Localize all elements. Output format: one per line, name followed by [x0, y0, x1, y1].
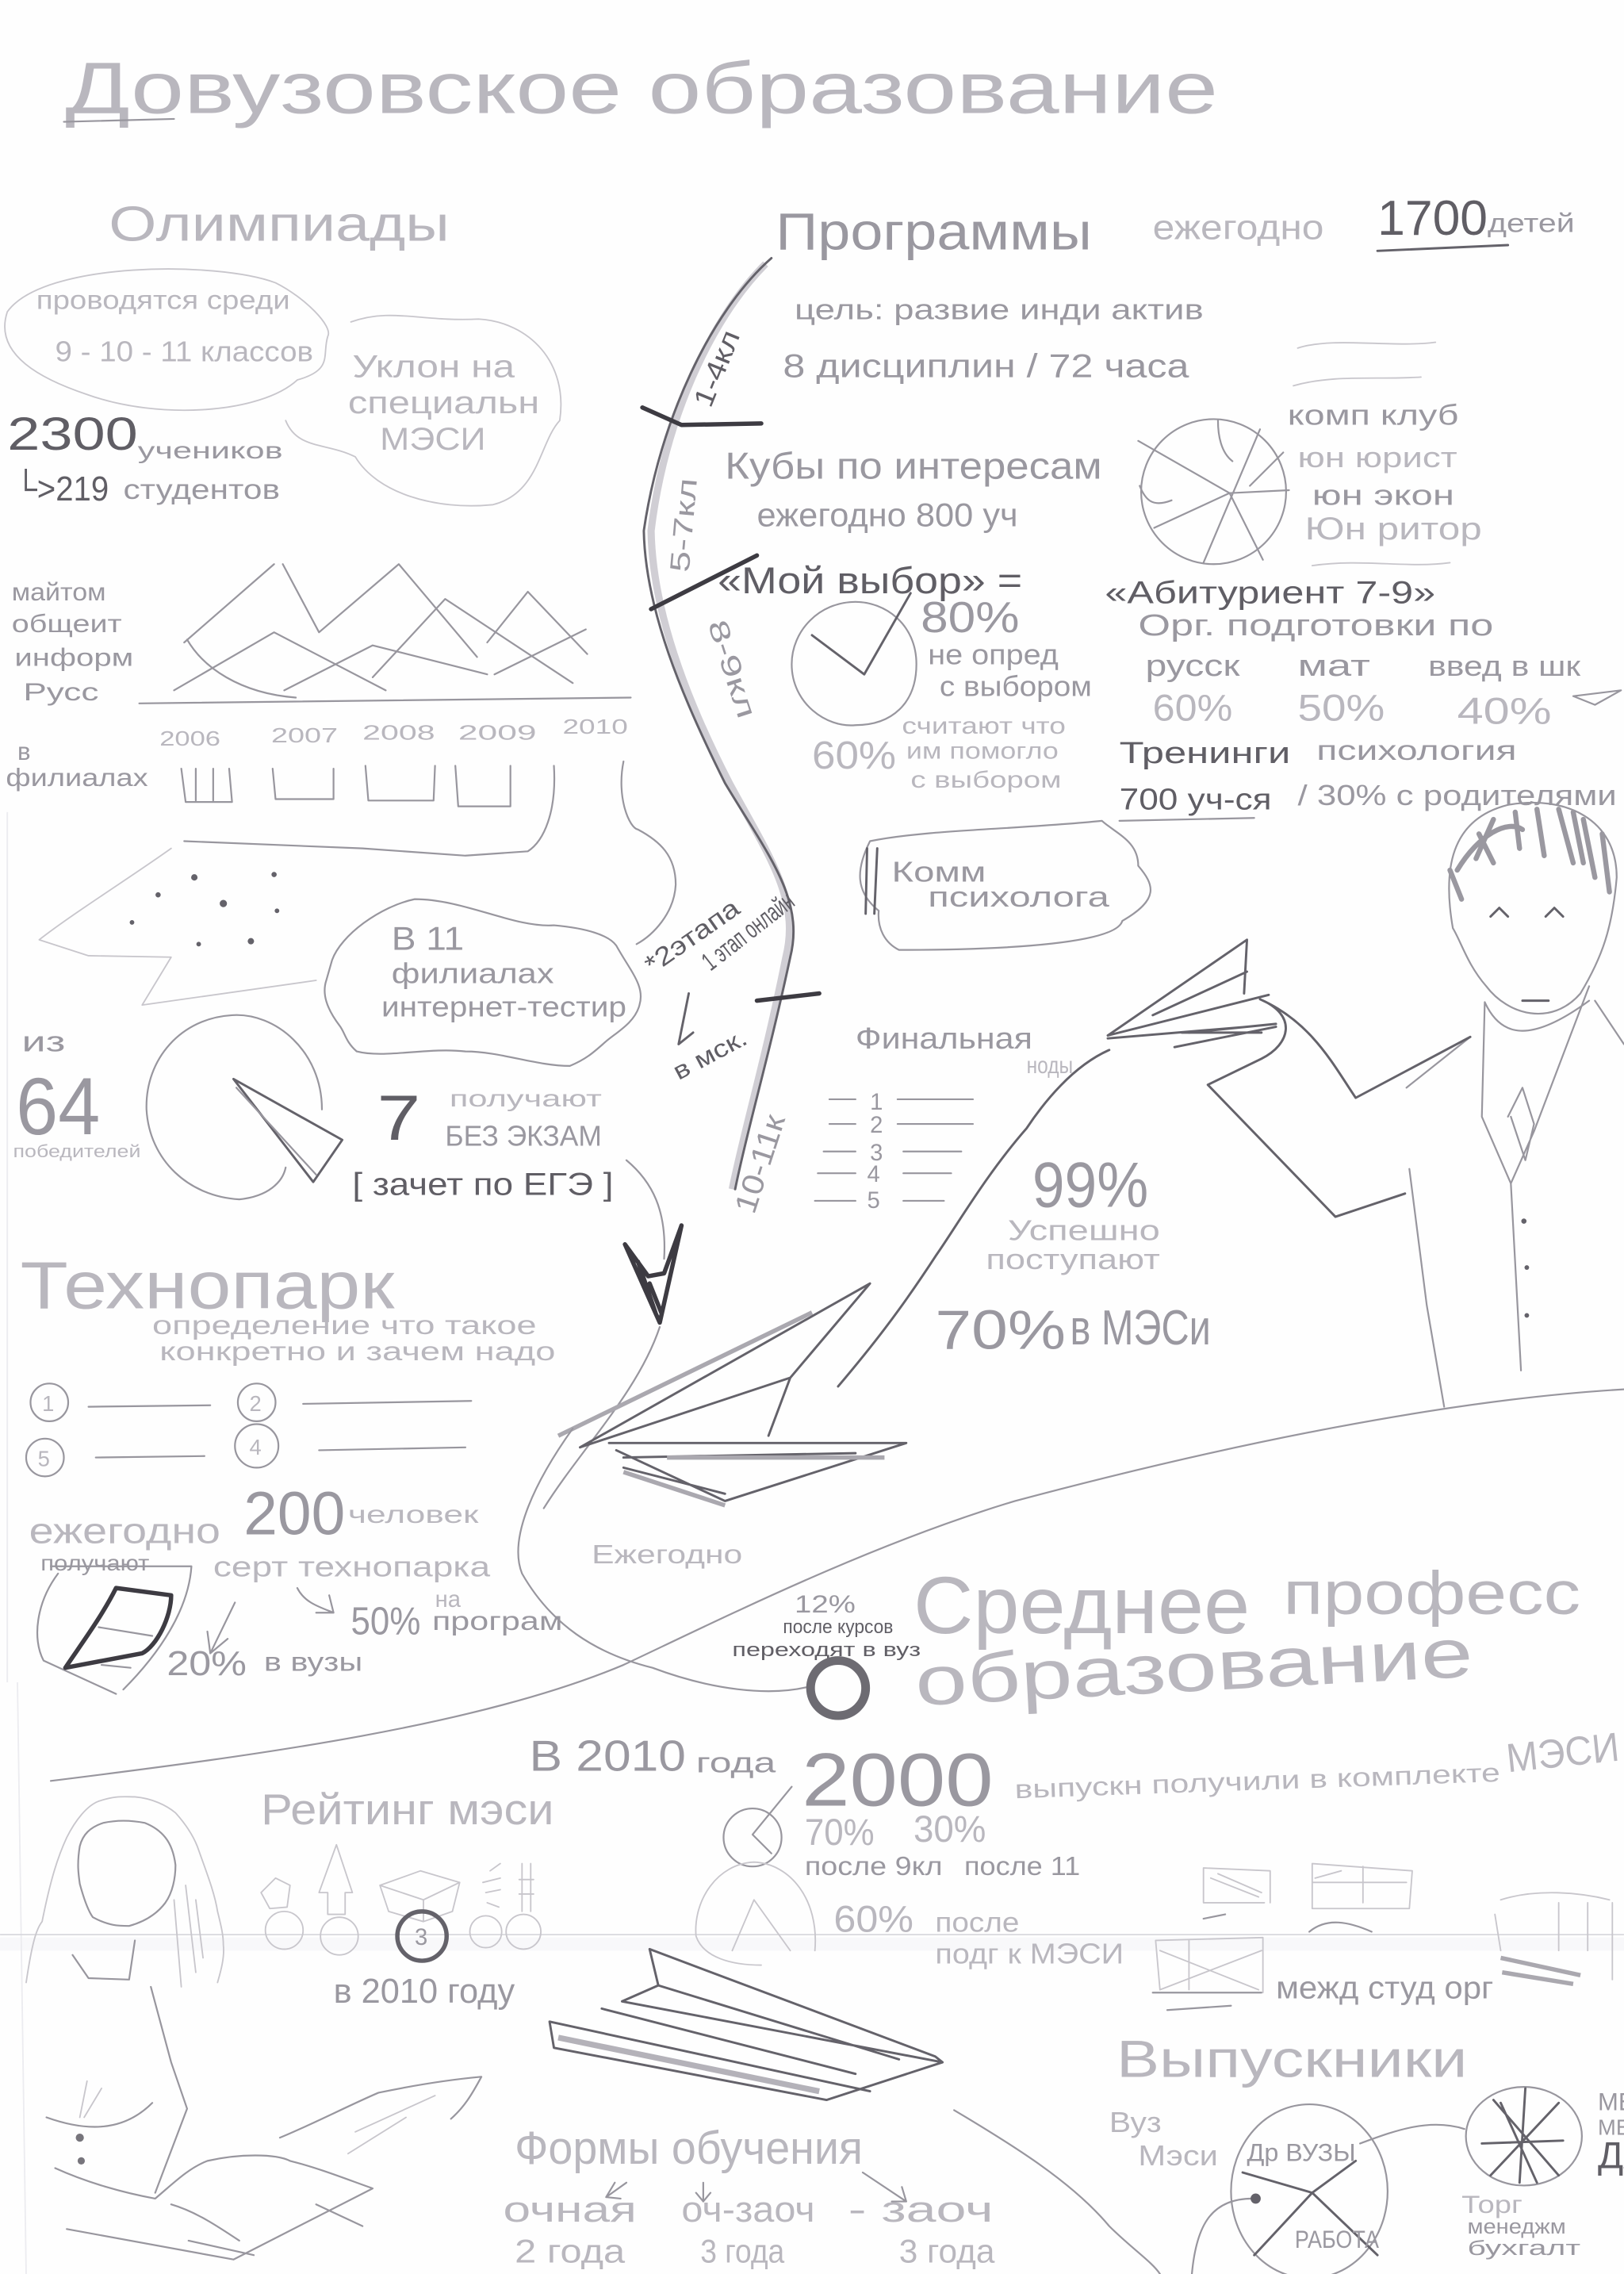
columns: forms and durations: очная [504, 2189, 637, 2230]
branches label: в [17, 738, 31, 765]
heading: technopark: Технопарк [21, 1248, 396, 1322]
icon: certificate: получают [40, 1551, 150, 1575]
stat: 2300 students: студентов [123, 475, 280, 505]
chart label: майтом [12, 578, 106, 606]
goal text: цель: развие инди актив [795, 293, 1204, 325]
stat: 60% helped: им помогло [906, 738, 1059, 764]
stat: 99% succeed: 99% [1032, 1149, 1148, 1221]
stat: 2000 graduates: выпускн получили в комплекте [1014, 1758, 1500, 1804]
stat: 80% undecided [921, 592, 1092, 703]
stat: 2300 students: учеников [138, 439, 283, 464]
panel: technopark [21, 1248, 563, 1694]
stat: 70% / 30% [805, 1808, 1080, 1881]
branch bars [182, 765, 511, 807]
labels: professions: менеджм [1467, 2216, 1566, 2238]
figure: man in suit [1174, 803, 1624, 1407]
stat: 60% after prep: подг к МЭСИ [935, 1938, 1124, 1970]
icon: open book [56, 2077, 481, 2260]
stat: of 64 winners: 64 [16, 1060, 100, 1152]
psychology trainings: Тренинги [1120, 736, 1290, 770]
numbered list: 5 [38, 1447, 50, 1471]
cloud: internet testing in 11 branches: В 11 [392, 920, 464, 957]
label: university MESI: Мэси [1138, 2139, 1218, 2172]
rating circles [266, 1912, 541, 1961]
stat: 80% undecided: 80% [921, 592, 1019, 642]
stat: 80% undecided: с выбором [940, 670, 1092, 703]
columns: forms and durations: 2 года [515, 2232, 626, 2269]
stat: 1700 children annually: 1700 [1377, 191, 1488, 246]
figure: girl reading [26, 1797, 481, 2260]
label: university MESI: Вуз [1109, 2106, 1162, 2138]
stage labels: 10-11к [729, 1110, 792, 1218]
goal text: 8 дисциплин / 72 часа [783, 347, 1189, 384]
panel: road with grade stages [639, 258, 819, 1218]
flight curve [838, 1050, 1109, 1386]
stat: 12% courses: переходят в вуз [732, 1639, 921, 1661]
cloud: internet testing in 11 branches: филиалах [392, 957, 554, 990]
stat: 70% / 30%: после 9кл [805, 1851, 943, 1881]
clubs list: Юн ритор [1305, 511, 1482, 546]
numbered list: 2 [250, 1391, 262, 1416]
stat: 7 admitted without exams [352, 1083, 614, 1202]
subject stats: 50% [1298, 688, 1385, 730]
chart label: общеит [12, 610, 122, 638]
finale list: 5 [867, 1188, 880, 1214]
stat: 1700 children annually [1153, 191, 1575, 251]
heading: olympiads: Олимпиады [109, 197, 450, 252]
stat: in 2010: В 2010 [529, 1731, 686, 1781]
cloud: internet testing in 11 branches: интернет-тестир [381, 991, 626, 1023]
subject stats: русск [1146, 649, 1240, 683]
rating circles: 3 [415, 1925, 427, 1950]
finale list: 2 [870, 1113, 883, 1138]
labels: professions: бухгалт [1467, 2238, 1581, 2260]
branches label: филиалах [6, 764, 148, 792]
cloud: specialty focus: Уклон на [352, 348, 515, 384]
heading: rating: Рейтинг мэси [261, 1785, 554, 1834]
heading: forms of study: Формы обучения [515, 2123, 863, 2174]
stat: 60% after prep: 60% [833, 1898, 914, 1940]
labels: professions [1461, 2088, 1624, 2260]
stat: 70% to MESI [935, 1298, 1211, 1360]
stat: 12% courses [732, 1590, 921, 1661]
icons: monitors [1153, 1864, 1612, 2010]
finale list: ноды [1027, 1053, 1073, 1079]
cloud: held among grades 9-11 [5, 269, 328, 410]
labels: professions: Торг [1461, 2191, 1522, 2218]
stat: 2300 students: 2300 [7, 408, 138, 460]
chart label: информ [14, 643, 133, 671]
stat: 7 admitted without exams: БЕЗ ЭКЗАМ [445, 1119, 602, 1152]
stat: 200 people annually: 200 [243, 1479, 345, 1547]
stage labels: 8-9кл [702, 616, 761, 722]
columns: forms and durations: оч-заоч [681, 2189, 815, 2230]
stages note: 1 этап онлайн [696, 886, 799, 976]
stat: 60% helped [812, 714, 1066, 793]
heading: graduates: Выпускники [1116, 2029, 1467, 2088]
abiturient program [1105, 575, 1493, 642]
stat: 60% helped: 60% [812, 734, 896, 777]
subject stats: 60% [1153, 688, 1232, 730]
icons: ranking objects [261, 1845, 534, 1922]
clubs list: юн экон [1312, 478, 1454, 511]
flow curves [954, 2110, 1465, 2274]
arrows: forms [606, 2172, 906, 2202]
stat: 99% succeed: поступают [986, 1243, 1160, 1275]
stages note: в мск. [668, 1023, 752, 1085]
heading: secondary vocational: образование [914, 1614, 1475, 1720]
stat: 99% succeed [986, 1149, 1160, 1275]
numbered list: 1 [42, 1391, 54, 1416]
stat: 99% succeed: Успешно [1008, 1214, 1160, 1246]
cloud: held among grades 9-11: 9 - 10 - 11 классов [56, 335, 313, 367]
stat: of 64 winners: победителей [13, 1141, 140, 1161]
stat: 70% to MESI: в МЭСи [1070, 1301, 1211, 1356]
stat: 20%: 20% [167, 1644, 247, 1683]
clubs list [1288, 343, 1482, 566]
finale list: 1 [870, 1090, 883, 1115]
map of Russia [39, 761, 676, 1005]
cloud: specialty focus: специальн [348, 385, 539, 420]
stages note [639, 886, 799, 1085]
stat: 12% courses: после курсов [783, 1616, 893, 1638]
stat: 50%: 50% [351, 1600, 420, 1643]
stat: 200 people annually: ежегодно [29, 1510, 220, 1551]
my choice heading: «Мой выбор» = [718, 560, 1022, 602]
line chart: 2007 [271, 725, 338, 747]
label: international student orgs: межд студ орг [1276, 1970, 1493, 2006]
stat: 70% to MESI: 70% [935, 1298, 1066, 1360]
heading: programs: Программы [776, 201, 1092, 260]
cloud: internet testing in 11 branches [324, 899, 641, 1066]
note: annually: Ежегодно [592, 1540, 742, 1569]
stat: 70% / 30%: 70% [805, 1812, 875, 1854]
stat: 20% [167, 1644, 362, 1683]
icon: clubs wheel [1138, 419, 1289, 564]
stage labels: 1-4кл [688, 326, 746, 412]
line chart: 2008 [362, 723, 435, 745]
stat: 60% helped: считают что [902, 714, 1066, 739]
subject stats: 40% [1457, 690, 1552, 732]
pie chart: 7 of 64 [147, 1015, 343, 1199]
chart label [12, 578, 133, 706]
flight loop [519, 1428, 809, 1691]
stat: 2300 students: └>219 [14, 468, 109, 508]
divider curve [51, 1390, 1624, 1781]
chart label: Русс [23, 678, 98, 706]
numbered list: 4 [250, 1435, 262, 1459]
subtitle: определение что такое [152, 1310, 537, 1340]
psychology trainings: 700 уч-ся [1120, 782, 1272, 816]
cloud: psychologist: Комм [892, 856, 986, 888]
pie: graduate professions [1466, 2087, 1582, 2185]
pie: graduates destinations: РАБОТА [1295, 2226, 1379, 2253]
arrows [208, 1588, 334, 1653]
cloud: specialty focus [285, 316, 561, 506]
line chart: 2006 [159, 728, 220, 750]
stat: 70% / 30%: 30% [914, 1808, 986, 1850]
cloud: held among grades 9-11: проводятся среди [36, 285, 290, 314]
title: Довузовское образование [65, 48, 1218, 129]
label: university MESI [1109, 2106, 1218, 2172]
psychology trainings: психология [1316, 736, 1517, 766]
stat: 7 admitted without exams: 7 [377, 1083, 420, 1154]
stage labels: 5-7кл [665, 477, 703, 573]
cloud: psychologist [860, 821, 1151, 950]
pie: graduates destinations [1231, 2104, 1388, 2274]
stat: of 64 winners: из [21, 1026, 65, 1058]
stage ticks [642, 408, 819, 1001]
clubs [725, 445, 1102, 534]
goal text [783, 293, 1204, 384]
cloud: specialty focus: МЭСИ [380, 421, 486, 457]
heading: secondary vocational [914, 1559, 1580, 1720]
stat: 200 people annually [29, 1479, 479, 1551]
branches label [6, 738, 148, 792]
stat: 60% after prep [833, 1898, 1124, 1970]
icon: dark ring [810, 1661, 866, 1716]
stat: 1700 children annually: детей [1488, 209, 1575, 238]
stat: in 2010 [529, 1731, 776, 1781]
stat: 12% courses: 12% [795, 1590, 856, 1618]
stat: 60% after prep: после [935, 1908, 1019, 1938]
finale list [815, 1022, 1073, 1214]
stat: 80% undecided: не опред [928, 638, 1059, 670]
icon: small paper plane [1108, 940, 1276, 1038]
panel: MESI rating [261, 1785, 554, 2011]
abiturient program: «Абитуриент 7-9» [1105, 575, 1435, 611]
stat: 50% [351, 1587, 563, 1643]
subject stats [1146, 649, 1621, 732]
subject stats: мат [1298, 649, 1370, 683]
subtitle: конкретно и зачем надо [159, 1336, 555, 1366]
clubs: ежегодно 800 уч [757, 497, 1018, 534]
subject stats: введ в шк [1428, 650, 1581, 682]
stat: 20%: в вузы [264, 1647, 362, 1676]
clubs: Кубы по интересам [725, 445, 1102, 487]
pie: graduates destinations: Др ВУЗЫ [1247, 2138, 1356, 2166]
cloud: psychologist: психолога [928, 880, 1110, 913]
panel: secondary vocational education [529, 1559, 1624, 2274]
clubs list: комп клуб [1288, 399, 1458, 431]
icon: dark plane tail [544, 1160, 681, 1509]
psychology trainings: / 30% с родителями [1298, 779, 1617, 811]
stat: 2300 students [7, 408, 283, 508]
stat: 70% / 30%: после 11 [964, 1851, 1080, 1881]
columns: forms and durations: 3 года [899, 2232, 995, 2269]
subtitle [152, 1310, 555, 1366]
heading: secondary vocational: Среднее [914, 1559, 1250, 1651]
pies: 9th and 11th grade [695, 1787, 815, 1965]
line chart: 2010 [563, 716, 628, 738]
stat: 2000 graduates: 2000 [802, 1738, 994, 1822]
stages note: *2этапа [639, 892, 745, 979]
stage labels [665, 326, 792, 1218]
stat: 2000 graduates [802, 1724, 1622, 1822]
finale list: 4 [867, 1162, 880, 1187]
stat: in 2010: года [696, 1746, 776, 1778]
columns: forms and durations: 3 года [700, 2232, 785, 2269]
panel: forms of study [504, 2123, 995, 2269]
clubs list: юн юрист [1298, 441, 1457, 474]
numbered list [26, 1383, 471, 1476]
icon: certificate [37, 1551, 191, 1694]
stat: 7 admitted without exams: получают [450, 1087, 602, 1112]
heading: secondary vocational: професс [1283, 1559, 1580, 1628]
panel: olympiads [5, 197, 676, 1202]
label: in 2010: в 2010 году [334, 1972, 515, 2011]
finale list: Финальная [856, 1022, 1032, 1056]
stat: 1700 children annually: ежегодно [1153, 209, 1323, 247]
line chart: 2009 [458, 723, 537, 745]
pie: my choice [791, 593, 917, 726]
abiturient program: Орг. подготовки по [1138, 608, 1493, 642]
stat: 7 admitted without exams: [ зачет по ЕГЭ ] [352, 1167, 614, 1202]
finale list: 3 [870, 1141, 883, 1166]
columns: forms and durations: - заоч [848, 2189, 994, 2230]
icon: large paper plane [558, 1283, 906, 1505]
icon: bottom paper plane [550, 1949, 943, 2100]
psychology trainings [1120, 736, 1617, 821]
stat: 50%: програм [432, 1606, 563, 1636]
certificate text: серт технопарка [213, 1551, 491, 1583]
columns: forms and durations [504, 2189, 995, 2269]
stat: 60% helped: с выбором [910, 768, 1061, 793]
stat: 50%: на [435, 1587, 462, 1613]
line chart [140, 564, 630, 750]
stat: 200 people annually: человек [348, 1501, 479, 1528]
panel: programs [718, 191, 1624, 1407]
stat: of 64 winners [13, 1026, 140, 1161]
